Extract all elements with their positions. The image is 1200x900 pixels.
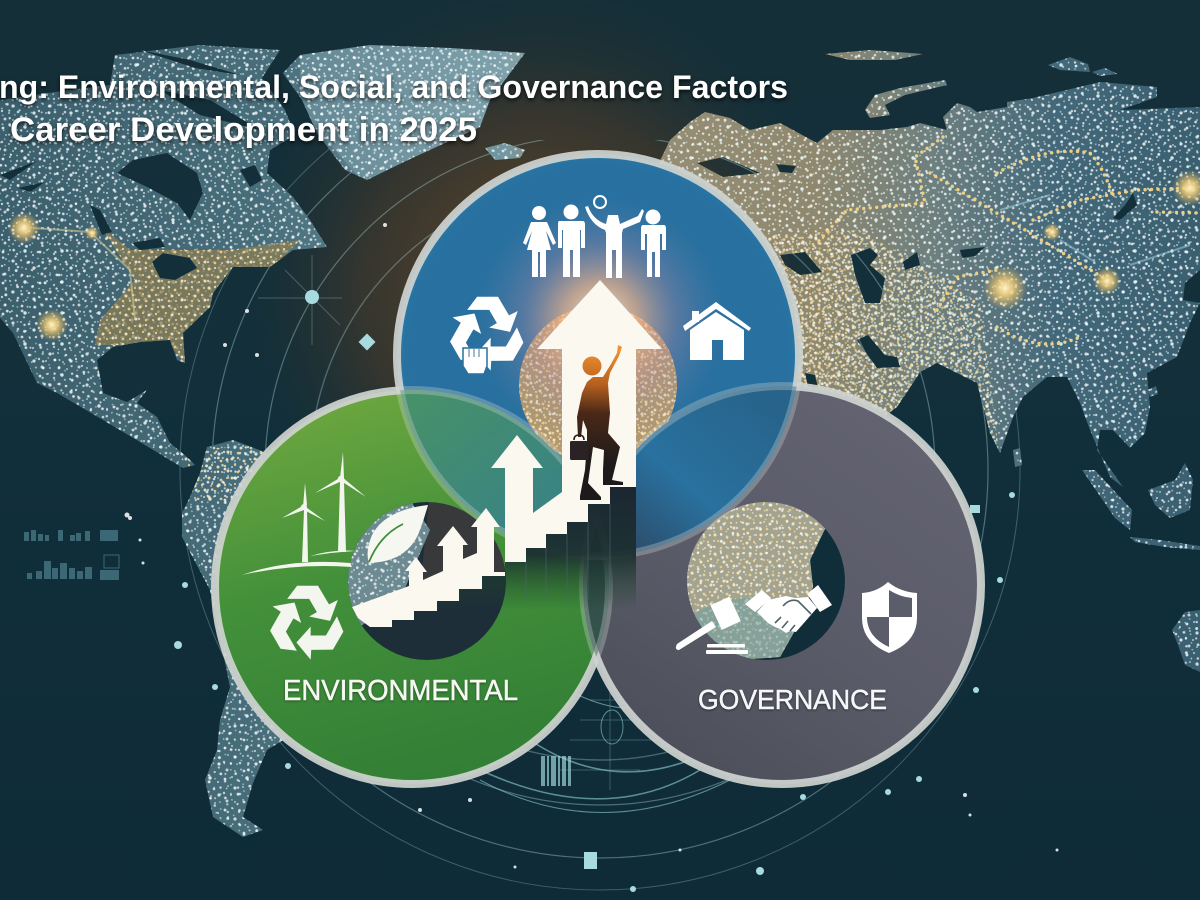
icon: recycle: [260, 586, 348, 667]
title: [0, 69, 788, 149]
label: environmental: ENVIRONMENTAL: [283, 675, 518, 707]
overlap: social and environmental: [400, 390, 562, 533]
climbing person with briefcase: [570, 345, 623, 500]
icon: gavel: [676, 597, 748, 654]
label: governance: GOVERNANCE: [698, 684, 887, 715]
rising white arrows and stairs: [352, 280, 662, 627]
panel: social circle: [397, 154, 799, 556]
circle rings: [215, 154, 981, 784]
icon: recycle with fist: [440, 297, 528, 378]
network arcs and nodes: [124, 140, 1058, 892]
title: ng: Environmental, Social, and Governance Factors: [0, 69, 788, 105]
icon: shield: [862, 582, 917, 653]
staircase shadow: [370, 487, 636, 640]
icon: leaf: [368, 505, 428, 563]
overlap: environmental and governance: [583, 564, 609, 656]
icon: wind turbines: [242, 452, 366, 575]
panel: environmental circle: [215, 390, 609, 784]
overlap: social and governance: [636, 386, 796, 552]
data dashboard bits: centre bottom: [470, 680, 730, 812]
title: Career Development in 2025: [10, 111, 477, 149]
panel: governance circle: [583, 386, 981, 784]
data dashboard bits: left: [24, 530, 119, 580]
sun glow behind arrow: [475, 195, 725, 445]
icon: house: [683, 302, 751, 360]
icon: group of people: [523, 196, 666, 278]
icon: handshake: [745, 585, 832, 633]
